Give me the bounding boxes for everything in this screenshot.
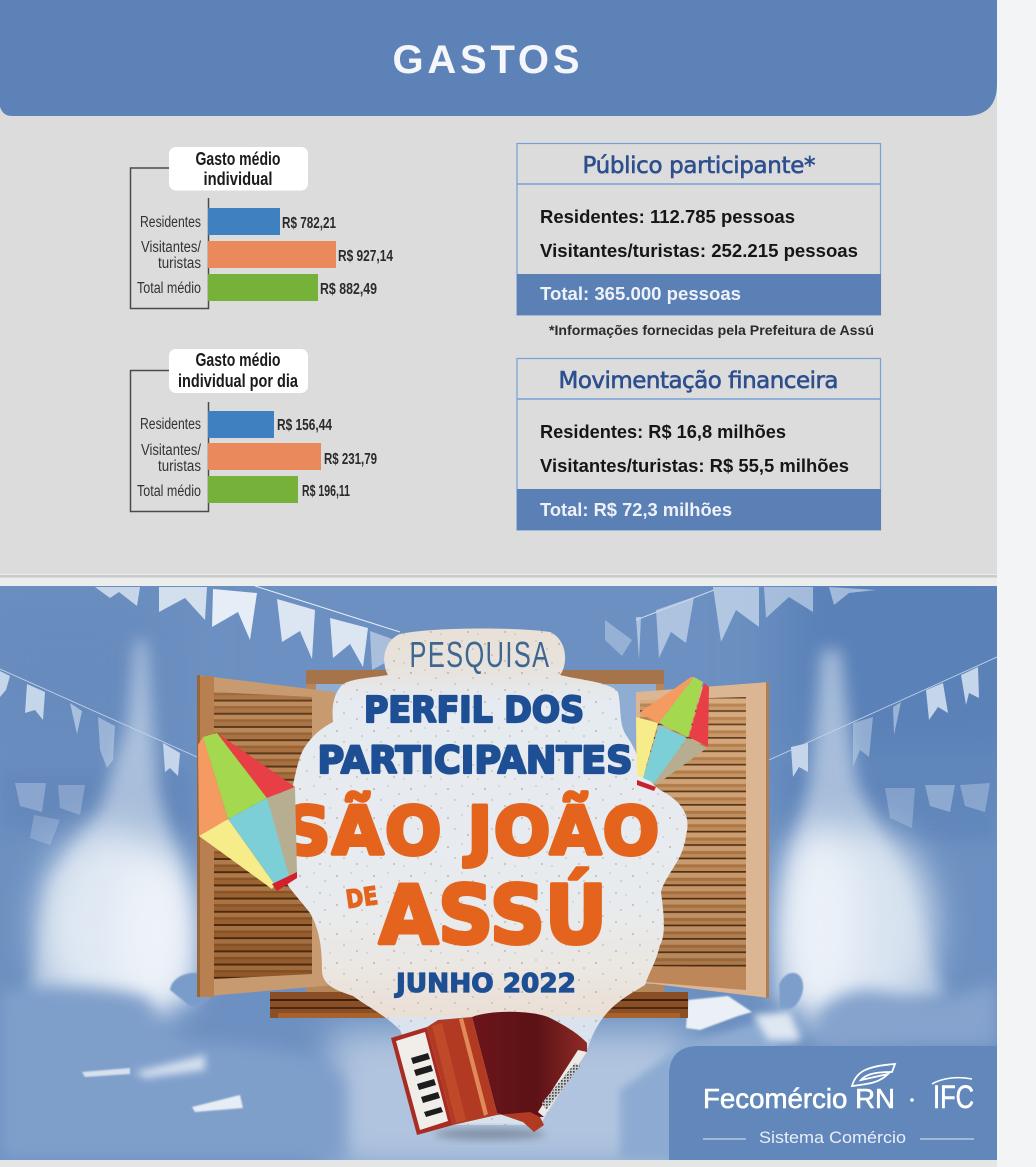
background: bonfire left (30, 640, 196, 1020)
window (197, 670, 769, 1018)
bar: total médio (137, 476, 350, 503)
icon: accordion (391, 1012, 587, 1140)
footnote: *Informações fornecidas pela Prefeitura de Assú (549, 323, 874, 338)
logo: separator dot (910, 1098, 914, 1102)
total bar (517, 274, 881, 315)
panel: público participante (517, 144, 881, 315)
heading: junho 2022: JUNHO 2022 (394, 969, 576, 999)
left shutter (197, 675, 335, 997)
logo box (669, 1046, 997, 1160)
bar: visitantes/turistas: turistas (158, 255, 201, 272)
heading: são joão: SÃO JOÃO (283, 792, 659, 870)
text: residentes: Residentes: R$ 16,8 milhões (540, 422, 786, 442)
panel: movimentação financeira (517, 358, 881, 530)
panel heading: Movimentação financeira (558, 368, 838, 394)
title: GASTOS (392, 38, 580, 82)
bunting: mid left (0, 669, 197, 845)
bunting: top left (95, 586, 400, 670)
bar: residentes: Residentes (140, 214, 201, 231)
bar: visitantes/turistas (141, 442, 377, 475)
chart: gasto médio individual (130, 147, 393, 308)
panel: gastos background (0, 0, 997, 575)
text: visitantes/turistas: Visitantes/turistas: 252.215 pessoas (540, 241, 858, 261)
text: visitantes/turistas: Visitantes/turistas: R$ 55,5 milhões (540, 456, 849, 476)
bar: total médio: Total médio (137, 280, 201, 297)
text: sistema comércio: Sistema Comércio (759, 1128, 906, 1147)
bunting: top right (605, 587, 876, 660)
right shutter (636, 682, 769, 998)
bar: total médio (137, 274, 377, 301)
chart title: Gasto médio (196, 350, 280, 370)
bar: visitantes/turistas: Visitantes/ (141, 442, 202, 459)
bar: residentes: R$ 782,21 (282, 215, 336, 232)
background: crowd silhouettes (0, 973, 997, 1160)
chart: gasto médio individual por dia (130, 349, 377, 512)
heading: pesquisa: PESQUISA (410, 634, 550, 675)
window frame (306, 670, 664, 992)
logo: fecomércio rn (703, 1064, 895, 1114)
paper label blob (285, 628, 688, 1125)
heading: participantes: PARTICIPANTES (318, 739, 632, 782)
chart title: individual (204, 169, 272, 189)
chart title (169, 349, 308, 393)
bar: residentes: Residentes (140, 416, 201, 433)
text: residentes: Residentes: 112.785 pessoas (540, 207, 795, 227)
bar: visitantes/turistas: Visitantes/ (141, 239, 202, 256)
bar: visitantes/turistas: R$ 927,14 (338, 248, 393, 265)
background: bonfire right (775, 650, 945, 1025)
bar: residentes (140, 411, 332, 438)
chart title: Gasto médio (196, 149, 280, 169)
bottom strip (0, 1160, 997, 1167)
separator strip (0, 574, 997, 586)
background: tones (45, 586, 997, 1160)
bar: visitantes/turistas (141, 239, 393, 272)
bunting: mid right (769, 657, 997, 828)
logo: ifc: IFC (933, 1079, 974, 1115)
accordion grille (538, 1050, 587, 1117)
heading: de: DE (344, 881, 380, 914)
heading: perfil dos: PERFIL DOS (364, 690, 584, 731)
accordion keyboard (391, 1027, 453, 1135)
icon: left paper lantern (198, 733, 297, 891)
chart title: individual por dia (178, 371, 299, 391)
chart title (169, 147, 308, 190)
bar: total médio: Total médio (137, 483, 201, 500)
bar: residentes (140, 208, 336, 235)
heading: assú: ASSÚ (379, 868, 607, 962)
bar: residentes: R$ 156,44 (277, 417, 332, 434)
icon: right paper lantern (636, 677, 709, 791)
bar: visitantes/turistas: turistas (158, 458, 201, 475)
panel heading: Público participante* (582, 153, 816, 179)
logo: ifc (932, 1076, 974, 1108)
bar: visitantes/turistas: R$ 231,79 (324, 451, 377, 468)
bar: total médio: R$ 882,49 (320, 281, 377, 298)
total bar: Total: 365.000 pessoas (540, 284, 741, 304)
header: gastos (0, 0, 997, 116)
total bar (517, 489, 881, 530)
total bar: Total: R$ 72,3 milhões (540, 500, 732, 520)
panel: são joão banner (0, 586, 997, 1160)
logo: fecomércio rn: Fecomércio RN (703, 1083, 895, 1114)
window sill (270, 992, 688, 1018)
bar: total médio: R$ 196,11 (302, 483, 350, 500)
